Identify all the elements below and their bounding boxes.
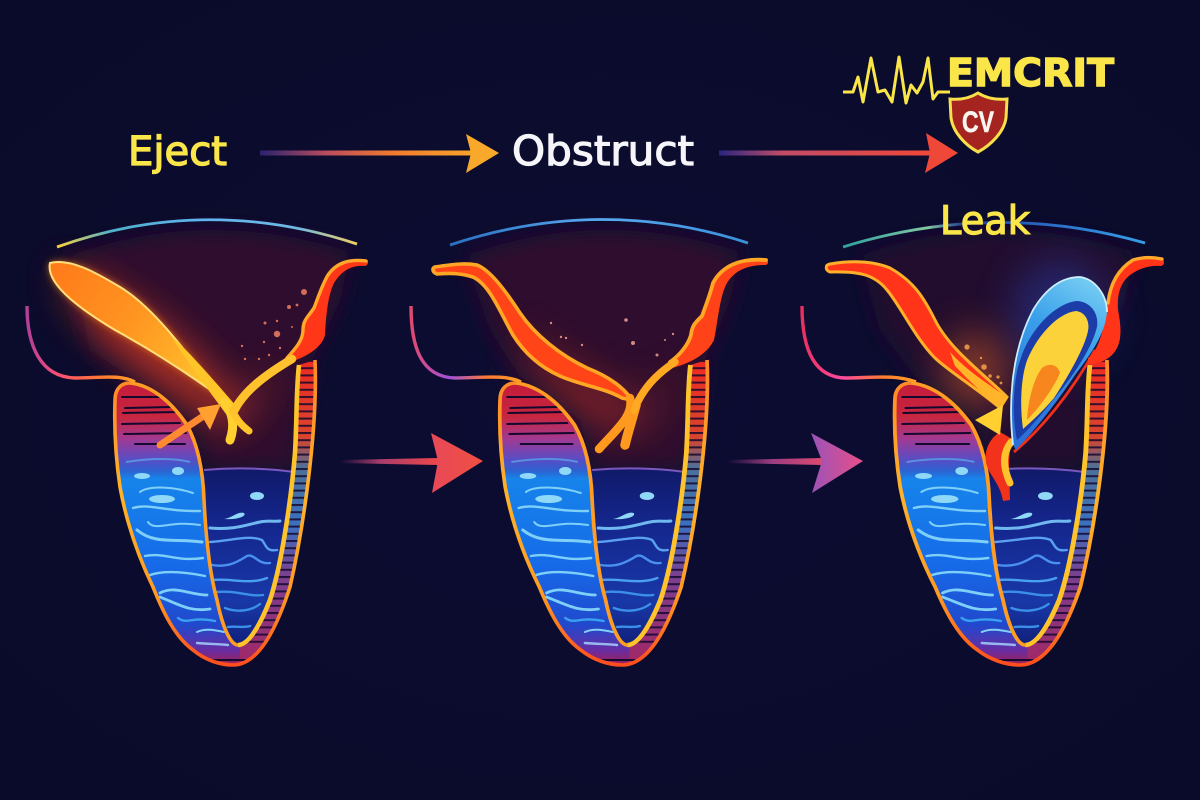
- panel: Eject: [27, 220, 368, 665]
- anterior leaflet: [826, 262, 1008, 410]
- coaptation chords: [599, 398, 636, 449]
- ventricle: [500, 360, 707, 665]
- arrow: panel 1 to panel 2: [340, 433, 483, 493]
- logo: wordmark: EMCRIT: [947, 51, 1115, 96]
- tented chords: [975, 405, 1014, 501]
- prolapsing balloon: [1011, 277, 1107, 450]
- arrow: Eject to Obstruct: [260, 134, 499, 173]
- ventricle: [895, 360, 1107, 665]
- sparks: [241, 289, 307, 360]
- step label: Leak: Leak: [940, 199, 1030, 244]
- flow arrow: [160, 404, 221, 445]
- anterior leaflet: [433, 264, 632, 400]
- posterior leaflet: [634, 258, 768, 410]
- leaflet glow: [60, 270, 290, 430]
- annulus curve: [802, 306, 916, 382]
- aortic arc: [843, 222, 1145, 247]
- leaflet glow: [520, 330, 690, 430]
- step label: Obstruct: Obstruct: [512, 127, 694, 175]
- logo: CV text: CV: [962, 106, 994, 139]
- orange leak glow: [943, 332, 1007, 408]
- ventricle: [115, 360, 315, 665]
- logo: shield: [950, 93, 1007, 152]
- logo: ECG trace: [843, 57, 950, 103]
- panel: Leak: [802, 222, 1164, 665]
- aortic arc: [57, 220, 357, 247]
- arrow: panel 2 to panel 3: [727, 433, 863, 493]
- anterior leaflet, swung open: [50, 262, 249, 440]
- arrow: Obstruct to Leak: [719, 133, 958, 173]
- haze in funnel: [465, 230, 740, 470]
- posterior leaflet rim: [1108, 258, 1162, 303]
- annulus curve: [27, 306, 135, 382]
- haze in funnel: [860, 230, 1135, 470]
- infographic canvas: [25, 56, 1164, 667]
- prolapsing leaflet lower edge: [1014, 350, 1095, 452]
- posterior leaflet: [234, 259, 368, 411]
- balloon glow: [1012, 260, 1108, 370]
- sparks: [964, 344, 1002, 384]
- step label: Eject: Eject: [128, 129, 227, 175]
- annulus curve: [411, 306, 521, 382]
- sparks: [550, 318, 674, 356]
- haze in funnel: [70, 230, 350, 470]
- panel: Obstruct: [411, 219, 768, 665]
- aortic arc: [450, 219, 748, 245]
- logo: EMCRIT CV: [843, 51, 1115, 152]
- posterior leaflet: [1088, 257, 1164, 365]
